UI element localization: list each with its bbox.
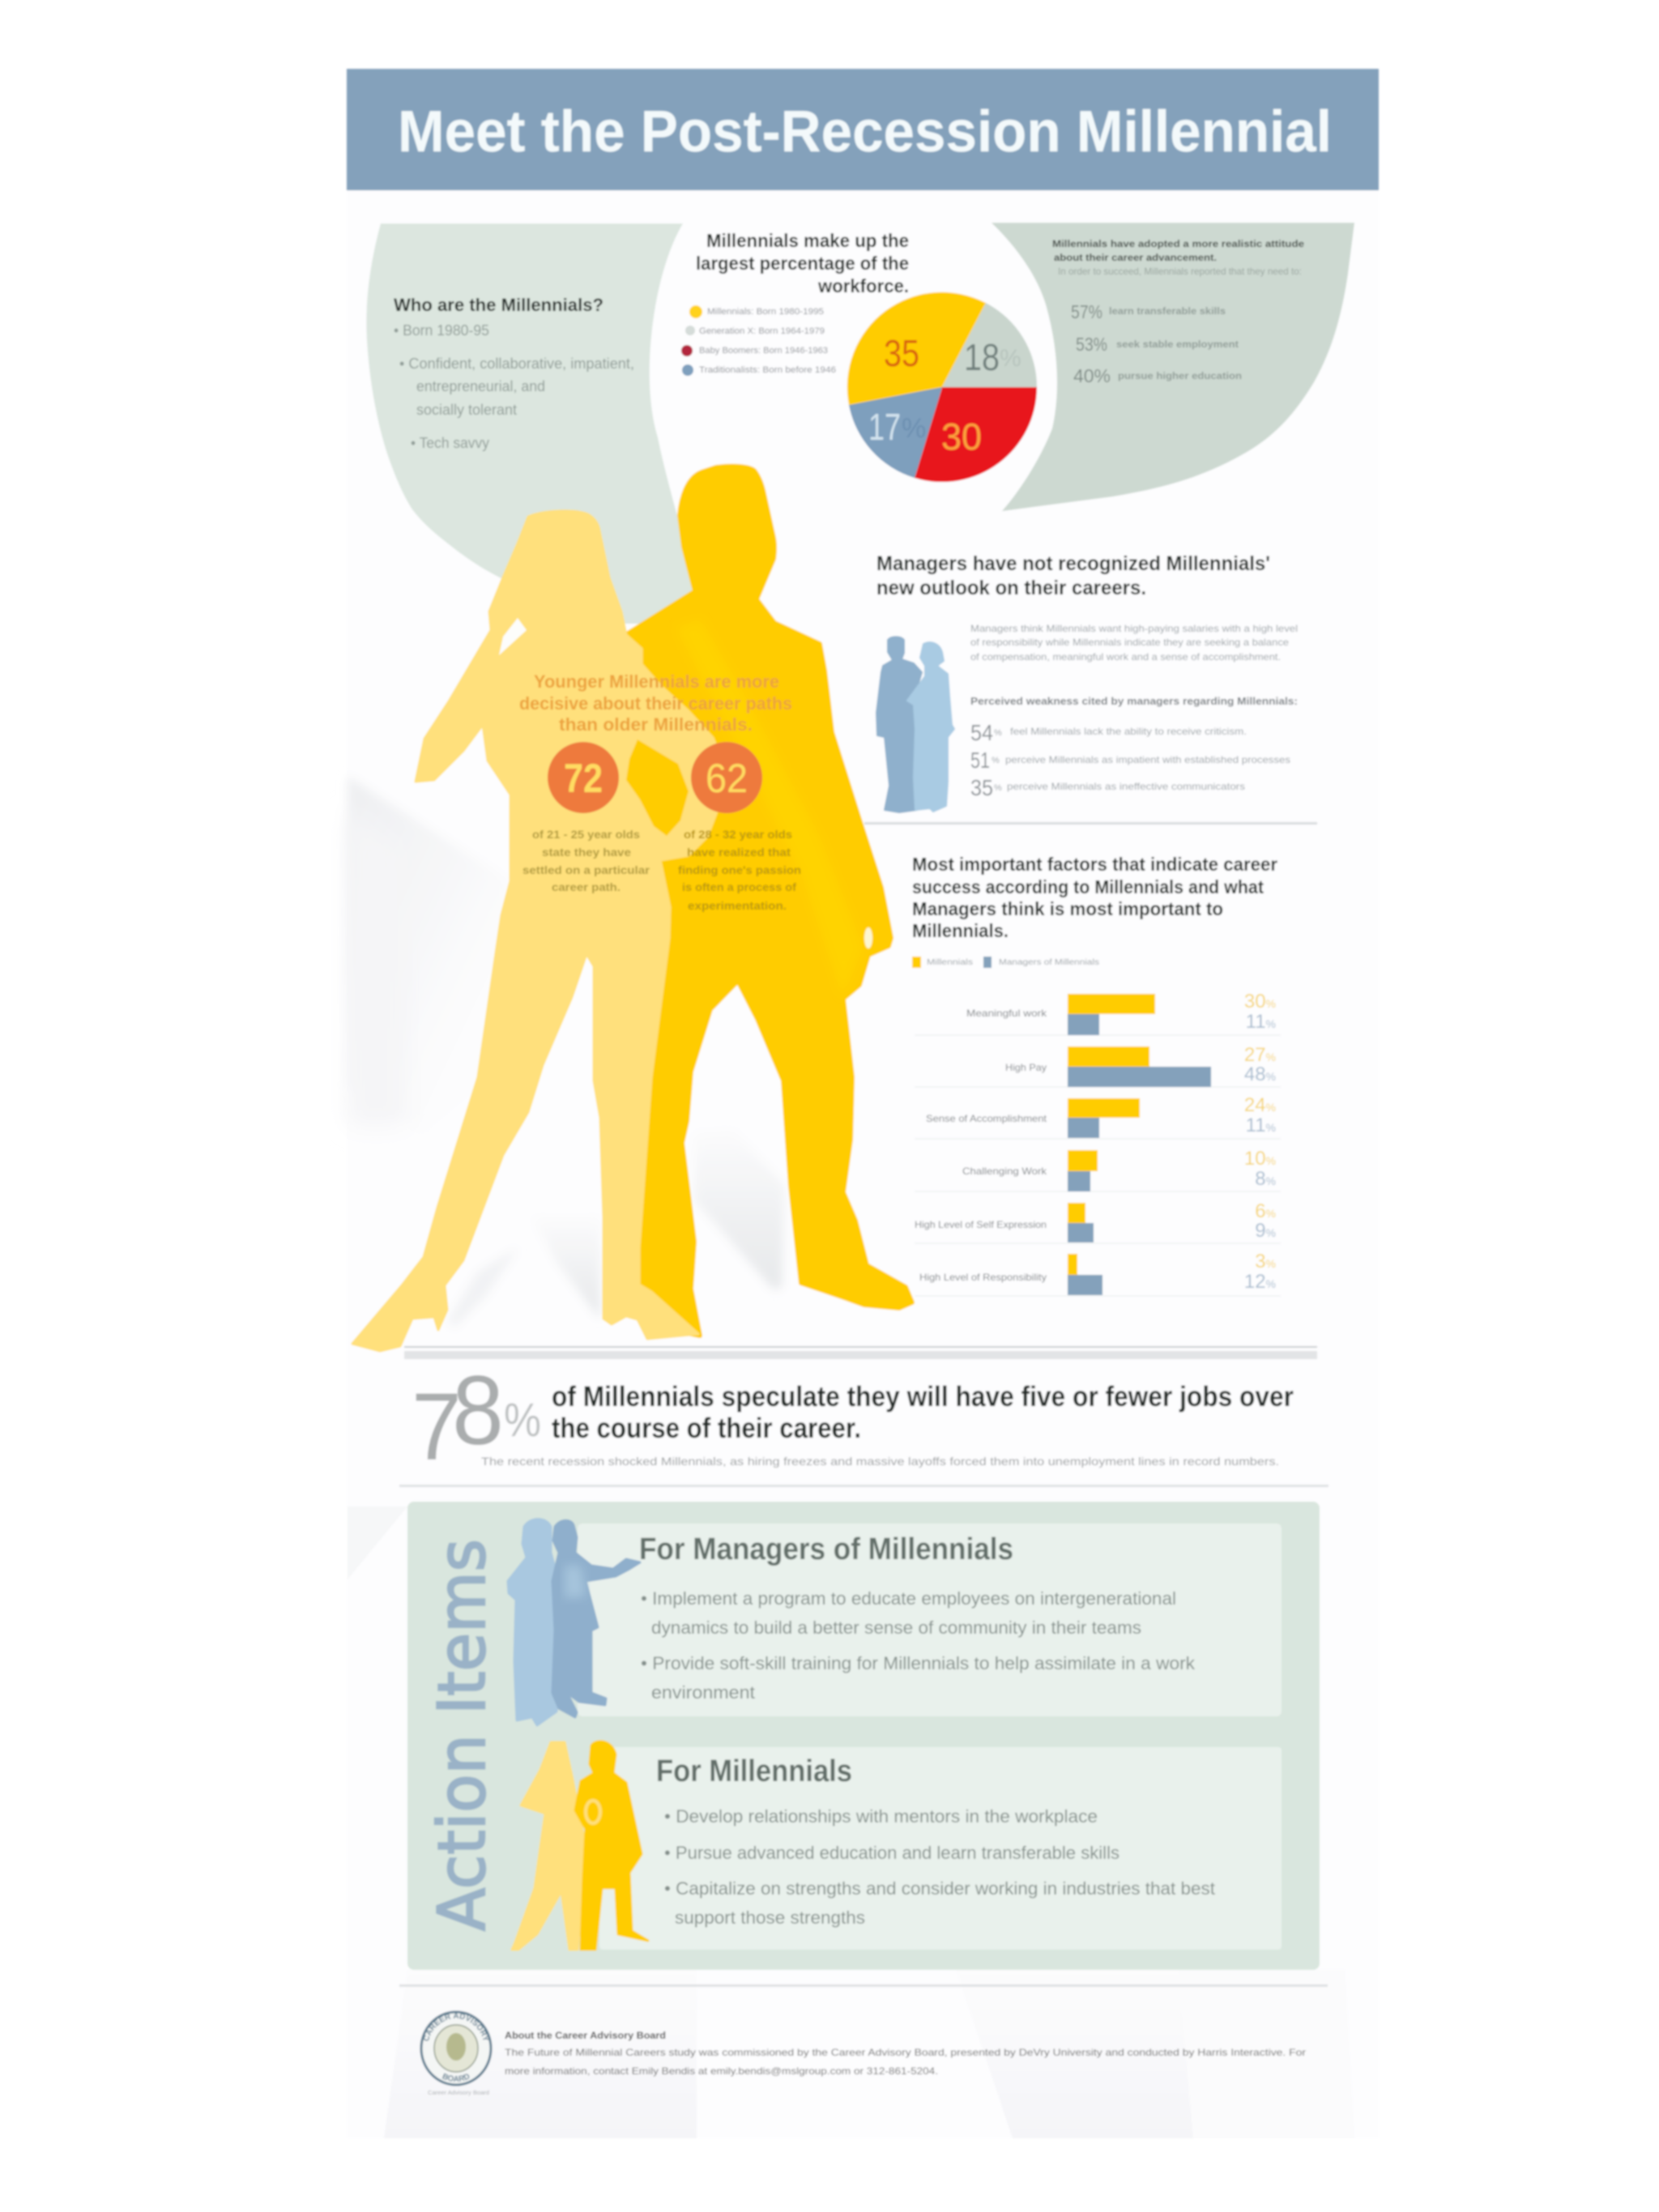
panel: who are the Millennials [366, 224, 709, 624]
pie chart [847, 292, 1037, 482]
bar labels: Challenging Work [962, 1166, 1047, 1177]
heading: younger Millennials: decisive about their career paths [519, 693, 792, 714]
box: for Millennials [599, 1747, 1282, 1950]
value: 18%: 18 [964, 336, 1000, 378]
icon: managers figures [508, 1519, 640, 1725]
list: Millennial actions: support those strengths [675, 1907, 865, 1928]
icon: Career Advisory Board seal: BOARD [441, 2072, 470, 2082]
list: Millennial actions: • Pursue advanced education and learn transferable skills [664, 1843, 1120, 1863]
subheading: perceived weakness: Perceived weakness cited by managers regarding Millennials: [970, 695, 1298, 707]
box: for managers [578, 1524, 1282, 1716]
bar labels: High Level of Responsibility [919, 1272, 1047, 1283]
text: managers paragraph: of responsibility while Millennials indicate they are seeking a balance [970, 637, 1289, 648]
bars: challenging work [1068, 1150, 1098, 1191]
icon: Career Advisory Board seal: Career Advisory Board [428, 2091, 489, 2096]
bar values: Millennials: 10% [1244, 1148, 1276, 1170]
heading: workforce: workforce. [817, 275, 909, 296]
icon: Career Advisory Board seal: CAREER ADVISORY [423, 2012, 489, 2042]
text: 62 percent description: finding one's passion [678, 863, 801, 876]
statistic: 40%: pursue higher education [1118, 370, 1242, 381]
heading: career success factors: Managers think is most important to [912, 898, 1223, 919]
text: 72 percent description: settled on a particular [522, 863, 650, 876]
list: Millennial actions [664, 1806, 1215, 1928]
heading: younger Millennials [519, 671, 792, 735]
list: traits [394, 322, 634, 451]
heading: younger Millennials: than older Millennials. [559, 714, 753, 735]
bar values: Managers: 11% [1246, 1011, 1276, 1033]
statistic: 53% [1076, 334, 1239, 355]
value: 78%: % [504, 1394, 541, 1447]
statistic: 57%: learn transferable skills [1109, 305, 1226, 317]
bars: sense of accomplishment [1068, 1098, 1140, 1138]
heading: career success factors: success according to Millennials and what [912, 876, 1264, 897]
bar labels: High Pay [1005, 1062, 1047, 1073]
bars: high pay [1068, 1046, 1211, 1087]
figure: woman silhouette [352, 511, 729, 1351]
bars: meaningful work [1068, 994, 1155, 1035]
panel: realistic attitude [992, 223, 1354, 511]
bar labels: Meaningful work [966, 1008, 1047, 1019]
bar labels: Sense of Accomplishment [926, 1113, 1047, 1124]
hand gap [864, 927, 872, 948]
statistic: 51%: perceive Millennials as impatient with established processes [1005, 754, 1290, 765]
text: managers paragraph: of compensation, meaningful work and a sense of accomplishment. [970, 651, 1281, 663]
heading: five or fewer jobs: of Millennials speculate they will have five or fewer jobs over [552, 1381, 1294, 1413]
title banner [347, 69, 1379, 190]
value: 30%: 30 [941, 416, 982, 458]
statistic: 57% [1071, 301, 1226, 322]
bars: responsibility [1068, 1254, 1102, 1295]
bar values: Millennials: 30% [1244, 991, 1276, 1012]
heading: younger Millennials: Younger Millennials are more [534, 671, 779, 692]
bar labels: High Level of Self Expression [915, 1219, 1047, 1230]
bar values: Managers: 11% [1246, 1115, 1276, 1136]
list: Millennial actions: • Capitalize on strengths and consider working in industries that best [664, 1878, 1215, 1899]
arm gap [499, 618, 527, 655]
statistic: 54%: feel Millennials lack the ability to receive criticism. [1010, 726, 1247, 737]
heading: managers outlook [876, 552, 1270, 599]
section: 78 percent statistic [412, 1355, 1294, 1481]
heading: career success factors [912, 854, 1277, 941]
statistic: 54%: 54 [970, 720, 993, 745]
heading: five or fewer jobs [552, 1381, 1294, 1444]
value: 17%: % [902, 413, 926, 444]
bar values: Millennials [1244, 991, 1276, 1272]
legend: workforce generations: Generation X: Born 1964-1979 [699, 326, 825, 336]
legend: workforce generations: Millennials: Born 1980-1995 [707, 307, 824, 317]
heading: workforce: largest percentage of the [696, 253, 909, 274]
statistic: 40%: 40% [1073, 365, 1111, 386]
bar values: Millennials: 27% [1244, 1044, 1276, 1066]
list: traits: • Tech savvy [411, 435, 489, 451]
statistic: 51% [970, 748, 1290, 773]
statistic: 35%: % [994, 783, 1002, 793]
statistic: 51%: 51 [970, 748, 990, 773]
statistic: 35%: perceive Millennials as ineffective communicators [1007, 781, 1245, 792]
callout: younger Millennials [519, 671, 801, 912]
legend: bar chart [912, 957, 1099, 968]
statistic: 35%: 35 [970, 775, 993, 800]
bar values: Managers: 12% [1244, 1271, 1276, 1293]
torso gap showing man [626, 739, 689, 836]
value: 78% [412, 1355, 541, 1481]
text: 62 percent description [678, 828, 801, 912]
icon: Career Advisory Board seal [419, 2010, 493, 2096]
heading: who are the Millennials: Who are the Millennials? [394, 295, 603, 315]
list: manager actions: • Provide soft-skill training for Millennials to help assimilate in a work [641, 1653, 1196, 1673]
section: career success factors [912, 854, 1281, 1297]
bar values: Managers: 8% [1255, 1168, 1276, 1190]
icon: manager silhouettes [876, 637, 954, 812]
background panel [347, 190, 1379, 2138]
value: 78%: 8 [452, 1355, 504, 1465]
text: 62 percent description: have realized that [687, 846, 791, 859]
footer text: The Future of Millennial Careers study was commissioned by the Career Advisory Board, presented by DeVry University and conducted by Harris Interactive. For [505, 2047, 1306, 2058]
legend: workforce generations [681, 305, 836, 376]
bar values: Managers [1244, 1011, 1276, 1293]
legend: workforce generations: Baby Boomers: Born 1946-1963 [699, 346, 828, 356]
bar chart [915, 991, 1281, 1297]
highlight stripe on man [676, 620, 863, 996]
value: 35%: 35 [884, 332, 919, 374]
text: 62 percent description: is often a process of [682, 880, 796, 893]
legend: bar chart: Millennials [927, 958, 973, 967]
list: manager actions [641, 1588, 1196, 1703]
text: managers paragraph: Managers think Millennials want high-paying salaries with a high level [970, 623, 1298, 634]
statistic: 53%: 53% [1076, 334, 1107, 355]
value: 17%: 17 [868, 406, 901, 448]
statistic: 53%: seek stable employment [1116, 339, 1239, 350]
text: 62 percent description: of 28 - 32 year olds [684, 828, 792, 841]
heading: workforce: Millennials make up the [706, 230, 909, 251]
statistic: 72 percent [548, 742, 619, 813]
text: recession note: The recent recession shocked Millennials, as hiring freezes and massive layoffs forced them into unemployment lines in record numbers. [481, 1455, 1279, 1468]
statistic: 54% [970, 720, 1247, 745]
statistic: 54%: % [994, 728, 1002, 738]
statistic: 62 percent: 62 [706, 756, 748, 801]
figure: man silhouette [616, 467, 912, 1336]
statistic: 72 percent: 72 [564, 756, 603, 801]
bar values: Millennials: 24% [1244, 1094, 1276, 1116]
statistic: 35% [970, 775, 1245, 800]
heading: career success factors: Millennials. [912, 920, 1009, 941]
footer text: more information, contact Emily Bendis at emily.bendis@mslgroup.com or 312-861-5204. [505, 2065, 938, 2077]
footer text [505, 2030, 1306, 2077]
statistic: 51%: % [992, 756, 1000, 765]
heading: managers outlook: Managers have not recognized Millennials' [876, 552, 1270, 575]
bar values: Managers: 9% [1255, 1220, 1276, 1242]
heading: for managers: For Managers of Millennials [639, 1532, 1013, 1566]
value: 78%: 7 [412, 1374, 462, 1481]
title: Meet the Post-Recession Millennial [398, 100, 1332, 164]
list: traits: • Confident, collaborative, impatient, [399, 356, 634, 372]
heading: attitude: Millennials have adopted a more realistic attitude [1052, 238, 1304, 249]
legend: workforce generations: Traditionalists: Born before 1946 [699, 365, 836, 375]
legend: bar chart: Managers of Millennials [999, 958, 1099, 967]
heading: managers outlook: new outlook on their careers. [876, 577, 1146, 599]
text: 72 percent description: career path. [552, 880, 621, 893]
list: manager actions: • Implement a program to educate employees on intergenerational [641, 1588, 1176, 1609]
list: traits: • Born 1980-95 [394, 322, 489, 339]
section: managers outlook [876, 552, 1298, 812]
text: 72 percent description: of 21 - 25 year olds [532, 828, 640, 841]
text: 72 percent description: state they have [542, 846, 631, 859]
heading: for Millennials: For Millennials [656, 1754, 852, 1788]
statistic: 40% [1073, 365, 1242, 386]
statistic: 62 percent [691, 742, 762, 813]
value: 18%: % [1000, 345, 1021, 372]
list: Millennial actions: • Develop relationships with mentors in the workplace [664, 1806, 1098, 1826]
heading: workforce [696, 230, 909, 296]
arm loop [586, 1801, 600, 1823]
subheading: attitude: In order to succeed, Millennials reported that they need to: [1058, 266, 1302, 277]
bars: self expression [1068, 1203, 1094, 1242]
heading: five or fewer jobs: the course of their career. [552, 1413, 861, 1444]
footer text: About the Career Advisory Board [505, 2030, 666, 2041]
list: manager actions: environment [651, 1682, 755, 1703]
list: traits: entrepreneurial, and [416, 378, 545, 394]
bar values: Millennials: 6% [1255, 1200, 1276, 1222]
statistic: 57%: 57% [1071, 301, 1102, 322]
icon: Millennials figures [512, 1741, 648, 1950]
bar values: Managers: 48% [1244, 1063, 1276, 1085]
list: traits: socially tolerant [416, 402, 517, 418]
heading: action items: Action Items [424, 1539, 500, 1931]
list: manager actions: dynamics to build a better sense of community in their teams [651, 1617, 1141, 1638]
text: 62 percent description: experimentation. [688, 899, 787, 912]
heading: attitude [1052, 238, 1304, 263]
text: managers paragraph [970, 623, 1298, 663]
bar labels [915, 1008, 1047, 1283]
heading: career success factors: Most important factors that indicate career [912, 854, 1277, 875]
panel: action items [407, 1502, 1320, 1970]
text: 72 percent description [522, 828, 650, 893]
heading: attitude: about their career advancement. [1054, 252, 1217, 263]
bar values: Millennials: 3% [1255, 1251, 1276, 1272]
